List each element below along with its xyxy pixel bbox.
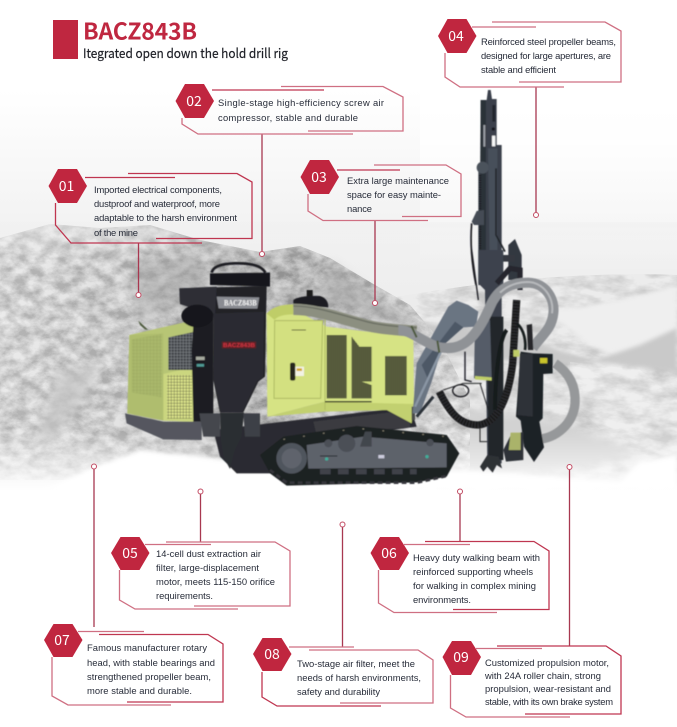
callout 03: space for easy mainte-: [347, 189, 441, 200]
callout 07: 07: [54, 630, 70, 650]
rig exhaust muffler and gray air pipe: [271, 290, 417, 331]
subtitle: Itegrated open down the hold drill rig: [83, 43, 289, 62]
drill rig machine: [125, 90, 575, 486]
callout 06: for walking in complex mining: [413, 580, 536, 591]
callout 01: adaptable to the harsh environment: [94, 212, 237, 223]
callout 06: reinforced supporting wheels: [413, 566, 533, 577]
drill bit: [480, 455, 502, 473]
callout 01: 01: [59, 176, 74, 196]
callout 01: [48, 169, 252, 298]
callout 02: [176, 84, 403, 256]
callout 07: strengthened propeller beam,: [87, 671, 211, 682]
dust canister: [503, 324, 553, 462]
background: misty mountains: [0, 90, 677, 510]
callout 07: [44, 464, 223, 705]
callout 09: stable, with its own brake system: [485, 696, 613, 707]
callout 08: [253, 522, 433, 706]
callout 07: head, with stable bearings and: [87, 657, 215, 668]
callout 08: Two-stage air filter, meet the: [297, 658, 415, 669]
callout 05: filter, large-displacement: [156, 562, 259, 573]
rig left cabinet: [125, 321, 202, 440]
callout 08: safety and durability: [297, 686, 380, 697]
callout 07: Famous manufacturer rotary: [87, 642, 207, 653]
rig black dust collector tower with BACZ843B plate: BACZ843B: [223, 343, 255, 349]
callout 05: 14-cell dust extraction air: [156, 548, 261, 559]
callout 05: 05: [122, 543, 138, 563]
black corrugated hose: [439, 300, 530, 442]
callout 03: 03: [311, 167, 327, 187]
callout 05: [111, 489, 290, 609]
title block: [53, 12, 289, 62]
callout 04: stable and efficient: [481, 64, 556, 75]
boom arm: [413, 301, 478, 417]
callout 02: 02: [186, 91, 202, 111]
title: BACZ843B: [83, 12, 197, 46]
callout 01: dustproof and waterproof, more: [94, 198, 220, 209]
callout 09: Customized propulsion motor,: [485, 657, 609, 668]
callout 01: of the mine: [94, 227, 138, 238]
callout 06: Heavy duty walking beam with: [413, 552, 540, 563]
callout 09: [442, 464, 621, 717]
callout 02: compressor, stable and durable: [218, 112, 358, 123]
callout 04: [438, 19, 621, 218]
callout 03: Extra large maintenance: [347, 175, 449, 186]
rig undercarriage and crawler track: [213, 407, 459, 486]
callout 04: Reinforced steel propeller beams,: [481, 36, 616, 47]
callout 07: more stable and durable.: [87, 685, 192, 696]
drill mast lower, boom arm, hoses, dust pipes and canister: [398, 250, 575, 473]
callout 08: needs of harsh environments,: [297, 672, 421, 683]
callout 01: Imported electrical components,: [94, 184, 222, 195]
callout 02: Single-stage high-efficiency screw air: [218, 97, 384, 108]
rig right green engine housing: [267, 308, 414, 423]
callout 06: environments.: [413, 594, 471, 605]
callout 04: 04: [448, 26, 464, 46]
red square: [53, 20, 78, 59]
callout 09: 09: [453, 647, 469, 667]
callout 05: motor, meets 115-150 orifice: [156, 576, 275, 587]
callout 04: designed for large apertures, are: [481, 50, 611, 61]
drill mast upper section: [471, 90, 522, 285]
callout 03: [300, 160, 461, 306]
callout 06: [370, 489, 549, 612]
callout 09: with 24A roller chain, strong: [484, 670, 601, 681]
rig black dust collector tower with BACZ843B plate: BACZ843B: [224, 299, 257, 308]
callout 05: requirements.: [156, 590, 213, 601]
rig black dust collector tower with BACZ843B plate: [179, 263, 270, 469]
callout 08: 08: [264, 644, 280, 664]
callout 09: propulsion, wear-resistant and: [485, 683, 611, 694]
callout 06: 06: [381, 543, 397, 563]
gray flexible air pipe: [398, 282, 575, 439]
callout 03: nance: [347, 203, 372, 214]
